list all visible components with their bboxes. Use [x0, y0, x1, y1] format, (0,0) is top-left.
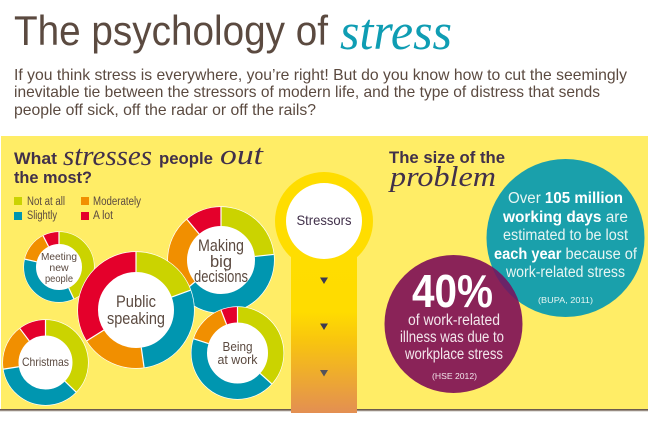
intro text: people off sick, off the radar or off the rails? — [14, 102, 316, 119]
callout: working days lost: Over 105 million — [508, 190, 623, 207]
heading: what stresses people out the most: the most? — [14, 168, 92, 187]
donut: public speaking: Public — [116, 292, 156, 311]
intro text — [14, 67, 627, 119]
donut: making big decisions: Making — [198, 237, 244, 255]
callout: 40 percent of illness: 40% — [412, 265, 493, 317]
callout: 40 percent of illness: workplace stress — [404, 346, 503, 363]
legend — [14, 196, 141, 222]
heading: what stresses people out the most: out — [220, 140, 264, 171]
donut: meeting new people: people — [45, 273, 73, 285]
title accent word: stress: stress — [340, 4, 452, 61]
donut: making big decisions — [167, 206, 275, 314]
heading: what stresses people out the most: stresses — [63, 141, 152, 172]
donut: public speaking — [77, 251, 195, 369]
callout: 40 percent of illness: illness was due to — [400, 329, 504, 346]
donut: making big decisions: big — [210, 253, 232, 271]
heading: what stresses people out the most: What — [14, 149, 57, 168]
callout: working days lost: (BUPA, 2011) — [538, 295, 593, 305]
donut: christmas: Christmas — [22, 355, 69, 369]
donut: meeting new people: Meeting — [41, 251, 77, 263]
callout: working days lost — [486, 159, 644, 317]
donut: being at work: at work — [218, 352, 258, 367]
heading: what stresses people out the most: people — [159, 149, 213, 168]
callout: working days lost: working days are — [502, 209, 628, 226]
arrow: down 1 — [320, 278, 328, 284]
intro text: If you think stress is everywhere, you’re right! But do you know how to cut the seemingly — [14, 67, 627, 84]
donut: meeting new people — [23, 231, 95, 303]
arrow: down 2 — [320, 324, 328, 330]
title: The psychology of — [14, 7, 328, 54]
callout: working days lost: estimated to be lost — [503, 227, 629, 244]
donut: meeting new people: new — [49, 262, 69, 274]
stressors thermometer — [275, 172, 373, 413]
legend: Not at all — [27, 196, 65, 208]
legend: A lot — [93, 210, 114, 222]
heading: the size of the problem: problem — [388, 162, 496, 193]
callout: 40 percent of illness — [384, 255, 522, 393]
title — [14, 4, 452, 61]
heading: the size of the problem — [388, 148, 505, 193]
callout: 40 percent of illness: (HSE 2012) — [432, 371, 477, 381]
callout: 40 percent of illness: of work-related — [408, 312, 500, 329]
donut: being at work — [191, 306, 284, 400]
donut: making big decisions: decisions — [194, 268, 248, 286]
callout: working days lost: work-related stress — [505, 264, 625, 281]
intro text: inevitable tie between the stressors of modern life, and the type of distress that sends — [14, 84, 600, 101]
donut: being at work: Being — [222, 339, 252, 354]
donut: christmas — [2, 319, 89, 406]
donut: public speaking: speaking — [107, 309, 165, 328]
heading: the size of the problem: The size of the — [389, 148, 505, 167]
legend: Moderately — [93, 196, 141, 208]
arrow: down 3 — [320, 370, 328, 376]
legend: Slightly — [27, 210, 57, 222]
callout: working days lost: each year because of — [494, 246, 638, 263]
stressors thermometer: Stressors — [296, 212, 352, 228]
yellow panel — [0, 136, 648, 411]
heading: what stresses people out the most — [14, 140, 264, 187]
